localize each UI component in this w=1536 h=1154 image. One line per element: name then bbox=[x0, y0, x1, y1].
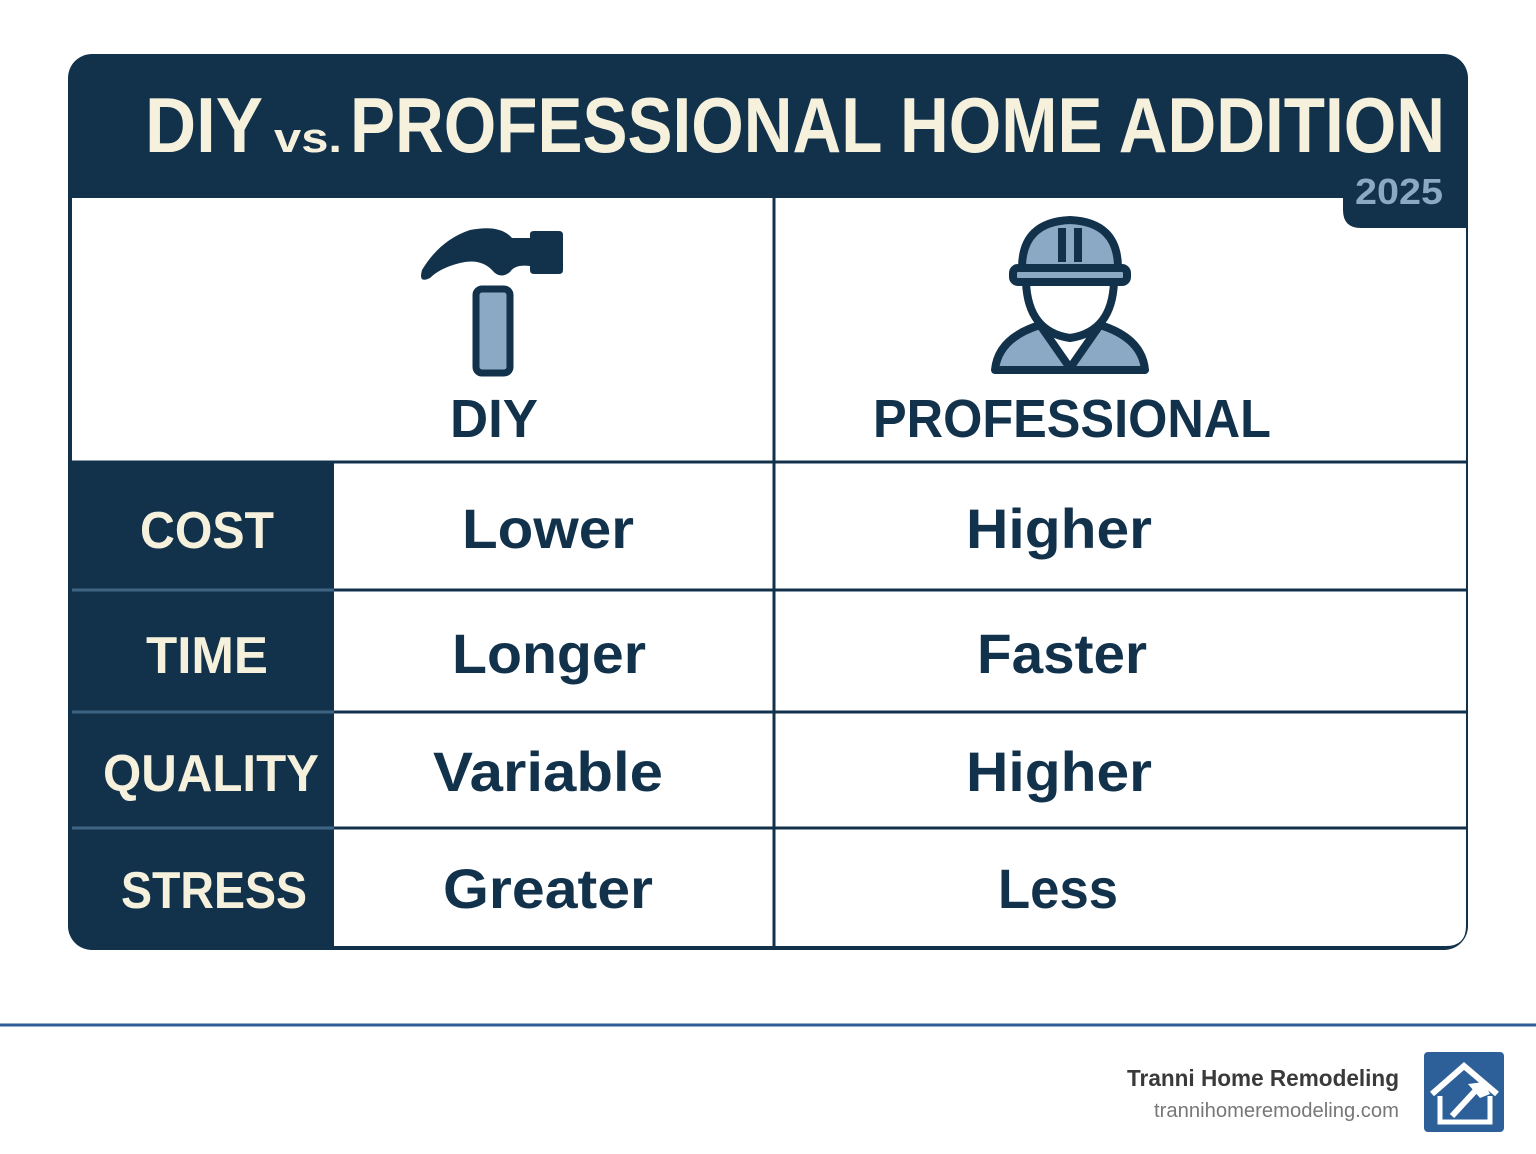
footer brand text: Tranni Home Remodeling bbox=[1127, 1065, 1399, 1091]
professional values: Higher bbox=[966, 740, 1152, 803]
row labels bbox=[103, 502, 319, 920]
column divider bbox=[772, 198, 776, 946]
footer brand text bbox=[1127, 1065, 1399, 1122]
icon: worker bbox=[995, 220, 1145, 370]
title: DIY bbox=[145, 81, 263, 169]
DIY values: Longer bbox=[452, 622, 646, 685]
row labels: STRESS bbox=[121, 862, 307, 920]
professional values bbox=[966, 497, 1152, 920]
DIY values bbox=[433, 497, 663, 920]
professional values: Higher bbox=[966, 497, 1152, 560]
DIY values: Variable bbox=[433, 740, 663, 803]
heading: DIY: DIY bbox=[450, 389, 538, 449]
row labels: QUALITY bbox=[103, 745, 319, 803]
professional values: Less bbox=[998, 857, 1118, 920]
DIY values: Greater bbox=[443, 857, 653, 920]
row labels: TIME bbox=[146, 627, 268, 685]
title: vs. bbox=[274, 114, 342, 161]
icon: hammer bbox=[421, 228, 563, 373]
row labels: COST bbox=[140, 502, 274, 560]
year tag: 2025 bbox=[1355, 171, 1443, 212]
footer brand text: trannihomeremodeling.com bbox=[1154, 1100, 1399, 1122]
card bbox=[68, 54, 1468, 950]
footer divider bbox=[0, 1024, 1536, 1026]
DIY values: Lower bbox=[462, 497, 634, 560]
professional values: Faster bbox=[977, 622, 1147, 685]
logo bbox=[1424, 1052, 1504, 1132]
heading: PROFESSIONAL: PROFESSIONAL bbox=[873, 389, 1271, 449]
